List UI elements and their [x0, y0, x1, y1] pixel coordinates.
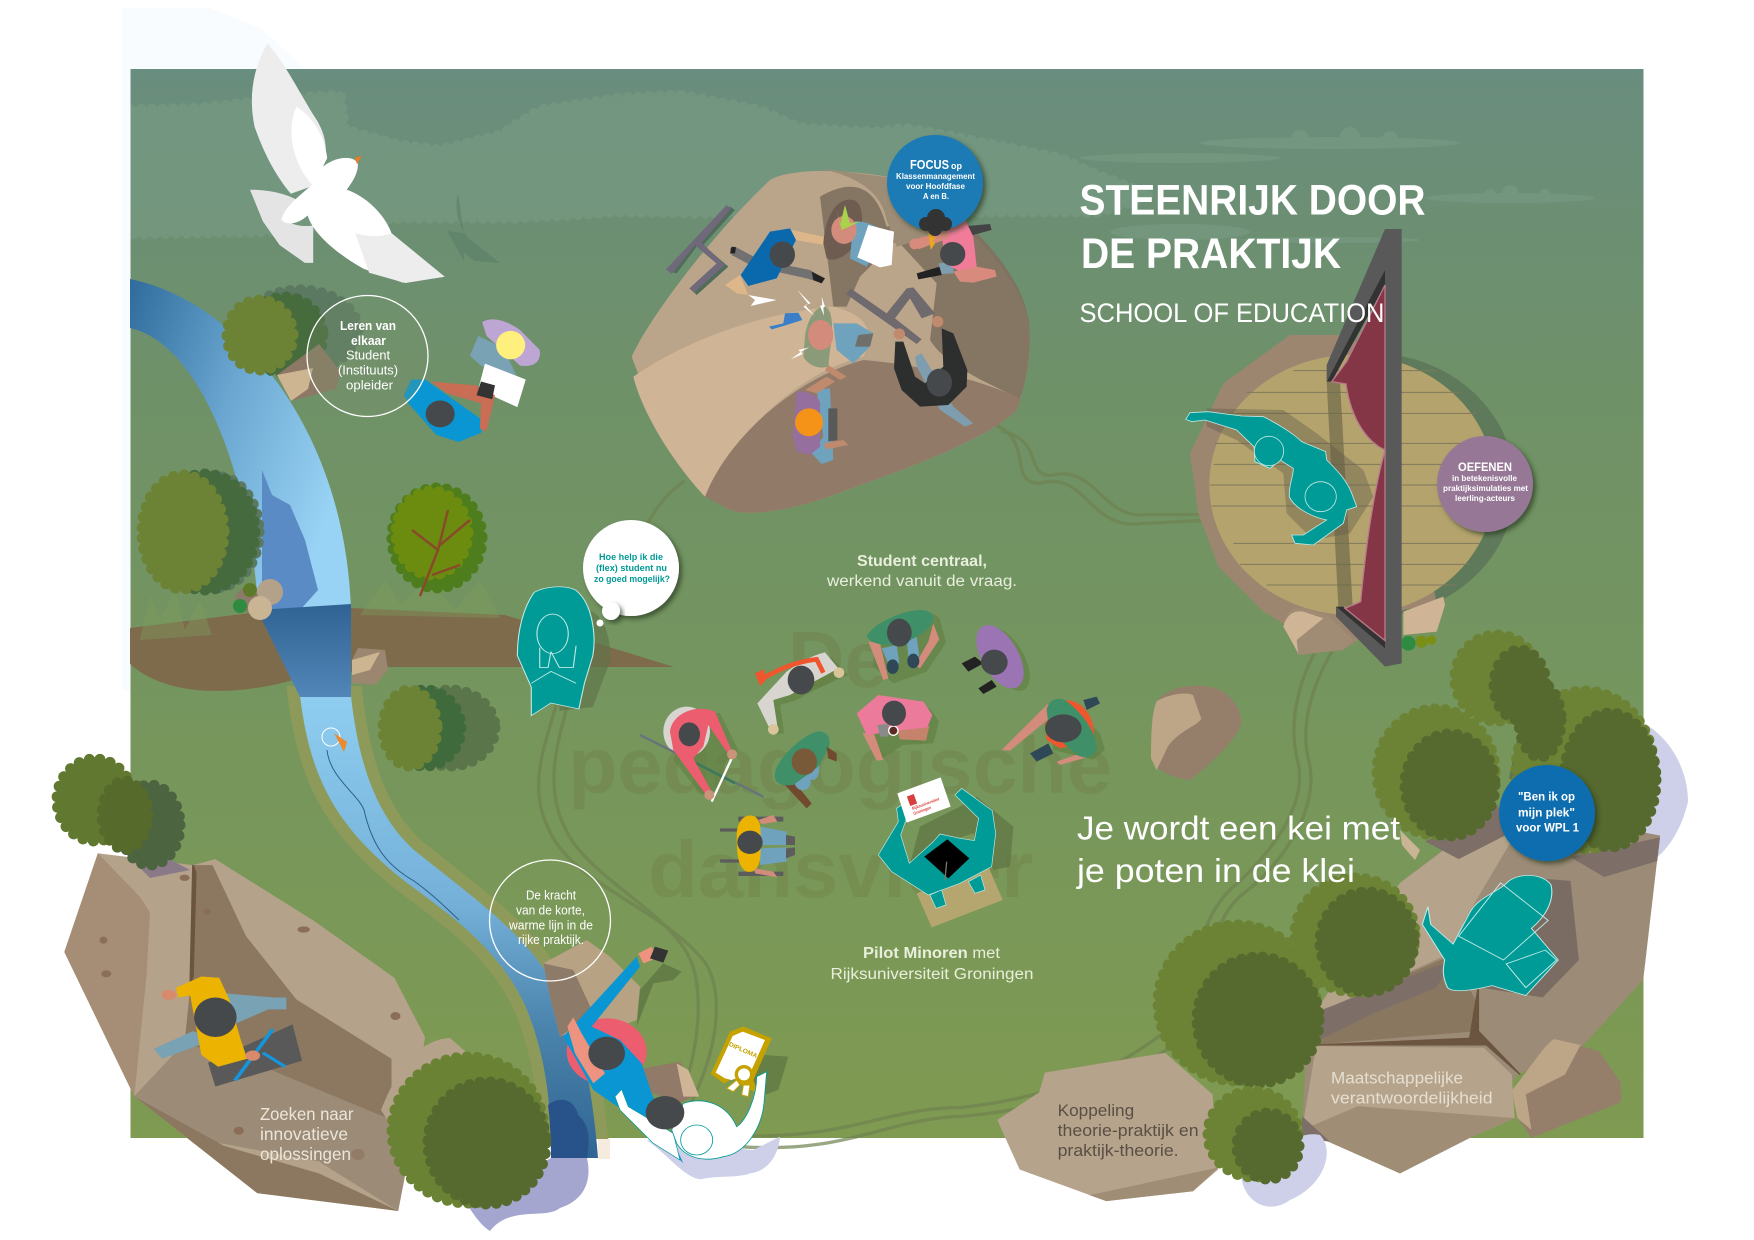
circle: De kracht: van de korte,: [516, 904, 585, 918]
text: Student centraal: [826, 553, 1017, 590]
circle: Leren van elkaar: elkaar: [351, 334, 386, 348]
curtains: [1332, 285, 1385, 641]
dancer head: [1305, 482, 1336, 512]
boulder lower right: [1512, 1039, 1621, 1138]
text: Student centraal: werkend vanuit de vraag.: [826, 573, 1017, 590]
text: Pilot Minoren: Pilot Minoren met: [863, 945, 1001, 962]
circle: OEFENEN: in betekenisvolle: [1452, 473, 1517, 483]
watermark title: De pedagogische dansvloer: dansvloer: [648, 825, 1033, 914]
cliff back shadows: [1509, 687, 1643, 833]
tree lavender shadow: [462, 1158, 589, 1231]
stage: [1186, 229, 1515, 667]
wall: [1327, 229, 1402, 667]
title: STEENRIJK DOOR: [1080, 177, 1426, 225]
trails through the field: [539, 425, 1337, 1148]
fish in the stream: [322, 728, 347, 752]
minor student: teal figure, mat and diploma card: Groningen: [913, 805, 932, 816]
lavender shadow under lower tree: [1240, 1134, 1327, 1207]
wall and stage plants near boulder: [1400, 830, 1420, 860]
circle: Leren van elkaar: Leren van: [340, 319, 396, 333]
table right: [846, 287, 935, 344]
title: DE PRAKTIJK: [1081, 230, 1341, 278]
big tree lower right: [1158, 925, 1319, 1083]
teal person on the cliff: [1422, 875, 1579, 998]
thought bubble: [583, 520, 679, 626]
student with book: [823, 200, 894, 267]
dancer shadow: [1207, 408, 1373, 540]
central group of people: [640, 610, 1105, 927]
circle: FOCUS: op: [951, 161, 962, 171]
river tree reflection: [262, 470, 318, 615]
teacher in black: [894, 316, 973, 427]
student in blue with tablet: [404, 379, 495, 442]
boulder below stage: [1283, 608, 1353, 655]
student blue: [725, 228, 827, 306]
rock behind bottom tree: [381, 1038, 480, 1190]
lower cliff: [1302, 1046, 1515, 1173]
red student: [567, 1018, 647, 1085]
table left: [666, 205, 731, 293]
student purple with orange hair: [793, 377, 848, 464]
student pink with lightning: [909, 219, 997, 283]
tree: below ledge: [383, 690, 495, 766]
diploma: [711, 1027, 772, 1097]
thought bubble: zo goed mogelijk?: [594, 574, 670, 585]
circle: Ben ik op mijn plek: voor WPL 1: [1516, 820, 1579, 834]
dove shadow: [447, 193, 500, 263]
teal student with book: [517, 587, 611, 716]
text: Pilot Minoren: [830, 945, 1034, 983]
tree group top right: [1377, 635, 1656, 849]
text: Koppeling theorie-praktijk: theorie-praktijk en: [1058, 1121, 1199, 1140]
diploma shadow: [740, 1053, 788, 1097]
circle: OEFENEN: leerling-acteurs: [1455, 493, 1515, 503]
circle: FOCUS: Klassenmanagement: [896, 171, 975, 181]
person in purple: [962, 617, 1039, 698]
circle: De kracht: rijke praktijk.: [518, 933, 584, 947]
background: green field: [130, 69, 1644, 1138]
circle: FOCUS: [887, 135, 983, 231]
person in green with brown hair: [775, 731, 837, 808]
bald student with lightning marks: [769, 290, 873, 380]
person in green: [867, 610, 946, 683]
minor student: teal figure, mat and diploma card: [878, 777, 1013, 927]
text: Pilot Minoren: Rijksuniversiteit Groningen: [830, 966, 1034, 983]
circle: FOCUS: FOCUS: [910, 157, 949, 172]
boulder in the field: [1151, 686, 1241, 780]
lavender tree shadow on white: [1643, 723, 1688, 857]
person in wheelchair: [720, 815, 795, 877]
searching student with laptop: [154, 977, 302, 1086]
rock beside the waterfall: [352, 648, 388, 685]
circle: Leren van elkaar: [307, 296, 428, 416]
bushy tree in the field: [392, 488, 482, 596]
text: Koppeling theorie-praktijk: Koppeling: [1058, 1101, 1134, 1120]
thought bubble: (flex) student nu: [596, 563, 667, 574]
slogan: Je wordt een kei met: [1077, 810, 1400, 846]
selfie and diploma group: [543, 940, 788, 1179]
circle: De kracht: [490, 860, 610, 981]
background: pale sky behind the field: [122, 8, 307, 690]
lavender shadow: [647, 1137, 780, 1179]
selfie shadow: [637, 963, 682, 1027]
grass tufts on the ledge: [140, 578, 500, 640]
circle: OEFENEN: praktijksimulaties met: [1443, 483, 1528, 493]
person in grey with orange strap: [755, 652, 848, 735]
table and bench shadow: [670, 207, 735, 295]
circle: FOCUS: A en B.: [923, 191, 949, 201]
reading student couple: [404, 319, 540, 442]
boulder behind the students: [543, 940, 640, 1037]
text: Maatschappelijke verantwoordelijkheid: Maatschappelijke: [1331, 1068, 1463, 1087]
circle: De kracht: warme lijn in de: [508, 919, 593, 933]
circle: Ben ik op mijn plek: mijn plek": [1518, 806, 1575, 820]
wall shadow on floor: [1327, 382, 1353, 607]
subtitle: SCHOOL OF EDUCATION: [1080, 298, 1384, 328]
river shaded bottom: [548, 1100, 589, 1158]
circle: OEFENEN: [1437, 436, 1533, 532]
circle: Ben ik op mijn plek: [1499, 765, 1595, 861]
small tree bottom: [1208, 1091, 1299, 1179]
watermark title: De pedagogische dansvloer: De: [788, 615, 888, 704]
stage rock: [1190, 335, 1437, 655]
clouds: [120, 95, 1595, 243]
earth ledge across the field: [130, 608, 674, 691]
rock under top-left tree: [277, 344, 341, 401]
text: Koppeling theorie-praktijk: [1058, 1101, 1199, 1160]
text: Maatschappelijke verantwoordelijkheid: [1331, 1068, 1493, 1108]
watermark title: De pedagogische dansvloer: [568, 615, 1112, 914]
stage shadow: [1228, 353, 1515, 617]
circle: Leren van elkaar: (Instituuts): [338, 364, 398, 378]
pink student curly hair above circle: [919, 209, 952, 236]
rocks by the waterfall: [233, 579, 283, 620]
tree: top left: [227, 290, 358, 373]
text: Zoeken naar innovatieve oplossingen: innovatieve: [260, 1124, 348, 1144]
white student with teal outline: [615, 1072, 767, 1160]
text: Koppeling theorie-praktijk: praktijk-theorie.: [1058, 1141, 1179, 1160]
dove: [250, 43, 445, 283]
watermark title: De pedagogische dansvloer: pedagogische: [568, 721, 1112, 810]
river, upper curve: [130, 279, 351, 610]
minor student: teal figure, mat and diploma card: Rijksuniversiteit: [911, 796, 940, 811]
stage floor: [1209, 355, 1495, 615]
big rock bottom left: [64, 853, 425, 1211]
person in pink with cup: [857, 695, 939, 761]
slogan: [1076, 810, 1400, 889]
tree group middle right: [1295, 878, 1415, 992]
person in red with cane: [640, 707, 763, 802]
river current line: [327, 750, 459, 920]
circle: Leren van elkaar: opleider: [346, 378, 393, 392]
big top rock: [632, 168, 1030, 513]
river bank: [300, 698, 598, 1158]
text: Zoeken naar innovatieve oplossingen: oplossingen: [260, 1144, 351, 1164]
river, lower stream: [300, 696, 598, 1158]
circle: Ben ik op mijn plek: "Ben ik op: [1518, 790, 1575, 804]
student with yellow hair: [470, 319, 540, 407]
circle: FOCUS: voor Hoofdfase: [906, 181, 965, 191]
right cliff: [1302, 806, 1660, 1173]
left lower rock: [997, 1053, 1218, 1201]
waterfall: [257, 604, 351, 697]
title: [1080, 177, 1426, 278]
text: Zoeken naar innovatieve oplossingen: Zoeken naar: [260, 1104, 354, 1124]
text: Zoeken naar innovatieve oplossingen: [260, 1104, 354, 1164]
diploma: DIPLOMA: [728, 1041, 759, 1060]
tree: bottom: [392, 1057, 546, 1204]
circle: OEFENEN: OEFENEN: [1458, 460, 1512, 474]
river bank below the field edge: [530, 1139, 612, 1171]
slogan: je poten in de klei: [1076, 852, 1355, 889]
circle: Leren van elkaar: Student: [346, 348, 391, 362]
thought bubble: Hoe help ik die: [599, 552, 663, 563]
circle: De kracht: De kracht: [526, 889, 576, 903]
tree: left of waterfall: [142, 474, 259, 590]
tree: top of left cliff: [57, 759, 180, 865]
text: Maatschappelijke verantwoordelijkheid: verantwoordelijkheid: [1331, 1089, 1493, 1108]
right rocks and trees: [997, 686, 1688, 1201]
dancer figure: [1186, 412, 1357, 545]
tree: left cliff lavender spot: [120, 848, 190, 878]
tree shadows on cliff: [1302, 806, 1660, 1142]
text: Student centraal: Student centraal,: [857, 553, 987, 570]
boulder and plants right of stage: [1403, 597, 1445, 635]
person in green and orange: [1002, 697, 1105, 765]
